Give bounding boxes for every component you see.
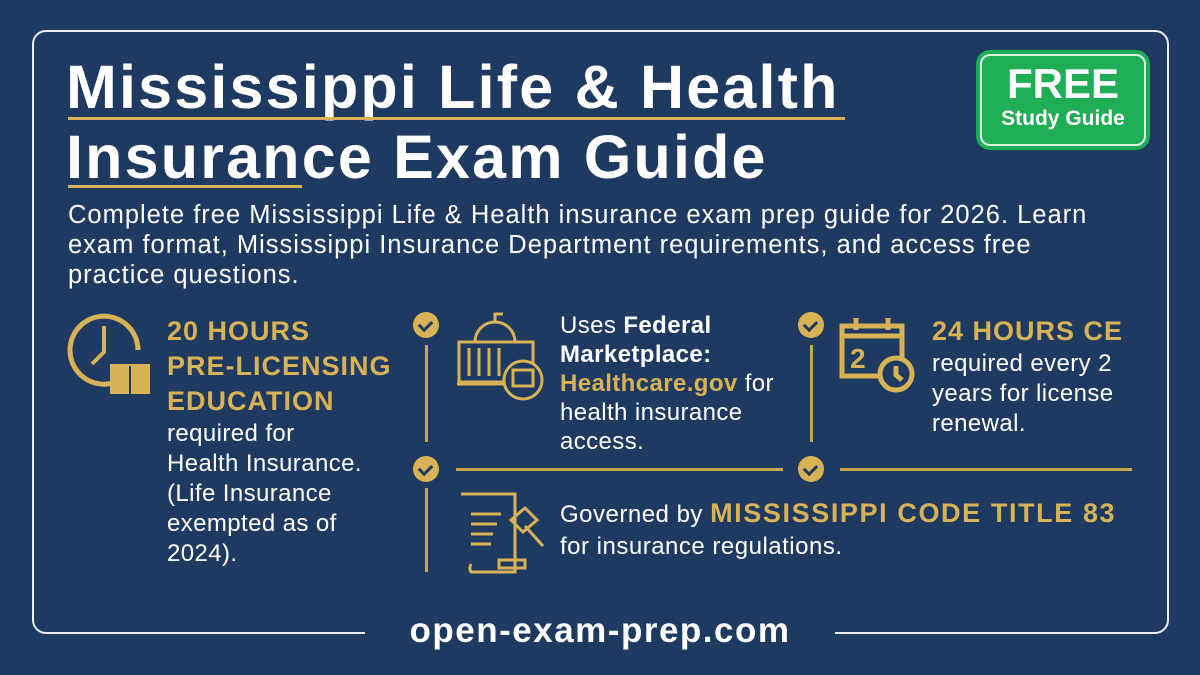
item: federal marketplace: health insurance (560, 399, 743, 426)
item: federal marketplace: Healthcare.gov for (560, 370, 774, 397)
item: pre-licensing: Health Insurance. (167, 450, 362, 477)
item: code title 83: Governed by MISSISSIPPI CODE TITLE 83 (560, 498, 1116, 528)
item: CE hours: years for license (932, 380, 1114, 407)
title (66, 53, 840, 191)
item: pre-licensing: exempted as of (167, 510, 337, 537)
item: code title 83 (560, 498, 1116, 560)
item: CE hours: required every 2 (932, 350, 1112, 377)
icon: calendar: 2 (850, 343, 866, 374)
item: CE hours (932, 316, 1123, 437)
item: federal marketplace: access. (560, 428, 644, 455)
footer url (365, 608, 835, 654)
connectors (413, 312, 439, 338)
footer url: open-exam-prep.com (410, 611, 790, 650)
item: pre-licensing: PRE-LICENSING (167, 351, 392, 381)
subtitle (68, 201, 1087, 289)
title: Insurance Exam Guide (66, 123, 768, 191)
subtitle: exam format, Mississippi Insurance Department requirements, and access free (68, 231, 1032, 259)
badge: free study guide: FREE (1007, 60, 1119, 107)
item: pre-licensing: EDUCATION (167, 386, 334, 416)
item: CE hours: renewal. (932, 410, 1026, 437)
item: code title 83: for insurance regulations. (560, 533, 842, 560)
item: pre-licensing: 20 HOURS (167, 316, 310, 346)
item: pre-licensing (167, 316, 392, 567)
item: pre-licensing: (Life Insurance (167, 480, 332, 507)
item: federal marketplace: Marketplace: (560, 341, 712, 368)
subtitle: Complete free Mississippi Life & Health insurance exam prep guide for 2026. Learn (68, 201, 1087, 229)
item: pre-licensing: 2024). (167, 540, 237, 567)
item: federal marketplace: Uses Federal (560, 312, 712, 339)
subtitle: practice questions. (68, 261, 300, 289)
badge: free study guide: Study Guide (1001, 107, 1125, 130)
item: federal marketplace (560, 312, 774, 455)
title: Mississippi Life & Health (66, 53, 840, 121)
icon: scroll with gavel (461, 492, 544, 574)
item: pre-licensing: required for (167, 420, 295, 447)
item: CE hours: 24 HOURS CE (932, 316, 1123, 346)
icon: capitol building (457, 312, 544, 400)
icon: calendar (840, 318, 914, 392)
badge: free study guide (976, 50, 1150, 150)
icon: clock and book (68, 314, 150, 394)
